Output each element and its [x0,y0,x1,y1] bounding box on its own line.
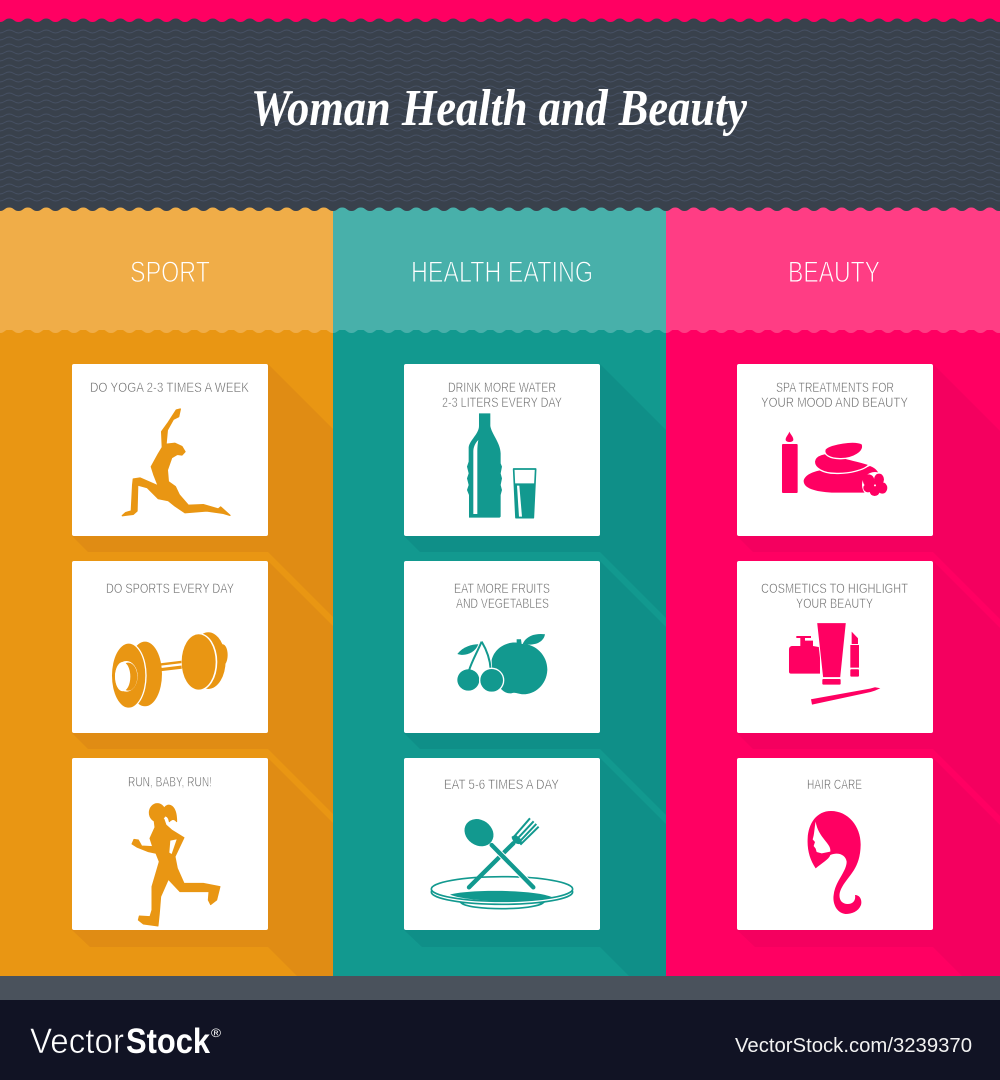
card: yoga [72,364,268,536]
title: Woman Health and Beauty [251,80,748,137]
card: hair [737,758,933,930]
card: spa: YOUR MOOD AND BEAUTY [761,395,908,410]
card: water [404,364,600,536]
card: cosmetics [737,561,933,733]
card: fruits: EAT MORE FRUITS [454,581,550,596]
footer band [0,976,1000,1000]
icon: cosmetics [789,623,880,705]
long shadows: sport [72,364,333,976]
card: run: RUN, BABY, RUN! [128,774,212,790]
card: spa: SPA TREATMENTS FOR [776,380,894,395]
long shadows: beauty [737,364,1000,976]
logo: VectorStock: Stock [126,1022,210,1061]
card: yoga: DO YOGA 2-3 TIMES A WEEK [90,380,249,395]
panel: health eating [333,204,666,976]
card: fruits [404,561,600,733]
icon: bottle and glass [467,413,536,518]
long shadows: health eating [404,364,666,976]
title banner [0,0,1000,210]
card: sports: DO SPORTS EVERY DAY [106,581,234,596]
icon: cherries and apple [457,634,547,694]
heading: beauty: BEAUTY [788,256,880,289]
icon: dumbbell [111,632,228,709]
card: meals [404,758,600,930]
card: fruits: AND VEGETABLES [456,596,549,611]
card: spa [737,364,933,536]
footer [0,1000,1000,1080]
card: water: 2-3 LITERS EVERY DAY [442,395,562,410]
icon: candle and stones [782,432,888,498]
logo: VectorStock [30,1022,221,1061]
image id: VectorStock.com/3239370 [735,1035,972,1057]
card: meals: EAT 5-6 TIMES A DAY [444,777,559,792]
heading: health eating: HEALTH EATING [411,256,593,289]
card: cosmetics: YOUR BEAUTY [796,596,873,611]
panel: sport [0,204,333,976]
logo: VectorStock: ® [211,1026,221,1040]
card: run [72,758,268,930]
icon: yoga pose [122,409,230,516]
card: water: DRINK MORE WATER [448,380,556,395]
logo: VectorStock: Vector [30,1022,124,1061]
card: cosmetics: COSMETICS TO HIGHLIGHT [761,581,908,596]
card: sports [72,561,268,733]
panel: beauty [666,204,1000,976]
icon: woman's hair profile [808,811,861,914]
icon: plate, spoon and fork [431,813,573,909]
heading: sport: SPORT [130,256,210,289]
card: hair: HAIR CARE [807,777,862,792]
icon: runner [132,804,220,926]
